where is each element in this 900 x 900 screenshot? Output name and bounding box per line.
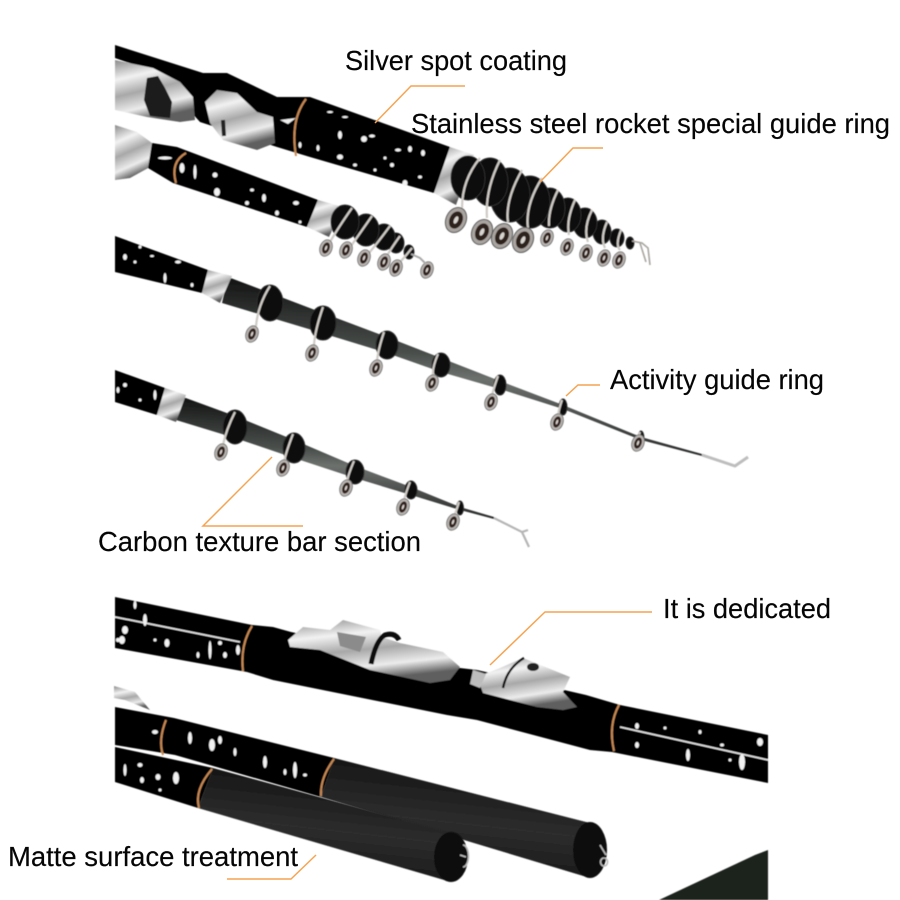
rod 4 tip top xyxy=(494,518,529,547)
rod 4 carbon taper xyxy=(176,397,494,519)
rod 3 tip top xyxy=(702,455,748,466)
cropped rod corner bottom right xyxy=(659,850,768,900)
rod 3 metal ferrule xyxy=(202,270,232,303)
rod 6 end cap xyxy=(573,822,608,878)
rod 6: rear matte grip xyxy=(114,686,608,878)
rod 6 glossy section xyxy=(115,707,334,797)
rod 6 matte grip xyxy=(321,758,590,878)
rod 4 guides xyxy=(223,410,464,515)
rod 5 main reel seat xyxy=(288,620,460,683)
rod 5 reel slot strap xyxy=(371,634,399,664)
rod 3: extended rod with activity guides xyxy=(115,236,748,466)
label: matte surface treatment: Matte surface treatment xyxy=(8,841,298,872)
label: carbon texture bar section xyxy=(98,457,421,557)
rod 6 speckles xyxy=(152,730,307,778)
rod 2 guide stack xyxy=(317,205,436,280)
label: silver spot coating xyxy=(345,45,567,123)
rod 7 speckles xyxy=(124,763,179,792)
rod 1 speckles xyxy=(298,111,425,186)
rod 1 glint xyxy=(280,118,296,124)
rod 5 black body xyxy=(115,597,768,783)
rod 1 copper ring xyxy=(294,99,306,156)
label: carbon texture bar section: Carbon texture bar section xyxy=(98,526,421,557)
label: stainless steel rocket special guide ring xyxy=(411,108,890,182)
rod 3 butt section xyxy=(115,236,208,293)
rod 7 matte grip xyxy=(198,768,451,882)
label: silver spot coating: Silver spot coating xyxy=(345,45,567,76)
rod 1 front reel hood xyxy=(205,90,275,150)
rod 1 metal ferrule xyxy=(434,147,474,205)
rod 4 guide arms xyxy=(223,412,459,516)
label: activity guide ring: Activity guide ring xyxy=(610,364,824,395)
label: stainless steel rocket special guide ring: Stainless steel rocket special guide ring xyxy=(411,108,890,139)
rod 1 rear reel dark gap xyxy=(144,76,172,118)
label: it is dedicated: It is dedicated xyxy=(663,593,831,624)
rod 3 speckles xyxy=(123,246,194,287)
rod 5 speckles right xyxy=(635,723,763,770)
rod 4: shorter extended rod xyxy=(115,370,529,547)
rod 4 metal ferrule xyxy=(157,388,186,422)
rod 5: reel seat close-up xyxy=(115,597,768,783)
rod 3 guides xyxy=(257,285,644,445)
rod 1 black blank xyxy=(115,45,450,193)
rod 7 glossy section xyxy=(115,747,213,808)
rod 2 metal ferrule xyxy=(307,200,343,237)
rod 1: tele rod with rocket guides xyxy=(115,45,650,270)
rod 3 carbon taper xyxy=(222,277,702,456)
rod 7: front matte grip xyxy=(115,747,469,882)
rod 7 end cap xyxy=(434,832,469,882)
rod 2 black blank xyxy=(148,143,318,227)
rod 4 speckles xyxy=(116,383,156,402)
rod 2 reel seat xyxy=(115,125,152,180)
rod 3 guide arms xyxy=(256,286,640,438)
rod 1 rear reel seat xyxy=(115,60,195,122)
rod 2 speckles xyxy=(158,156,302,224)
rod 5 highlight and copper rings xyxy=(115,617,768,760)
rod 5 front hood xyxy=(477,658,577,710)
rod 5 hood shadow xyxy=(337,632,366,652)
rod 1 rocket guide stack xyxy=(441,156,650,270)
rod 2: smaller tele rod xyxy=(115,125,436,280)
rod 2 copper ring xyxy=(174,153,186,183)
label: it is dedicated xyxy=(490,593,831,665)
rod 4 butt section xyxy=(115,370,165,415)
rod 5 neck glint xyxy=(470,670,486,688)
rod 5 speckles left xyxy=(116,601,240,659)
